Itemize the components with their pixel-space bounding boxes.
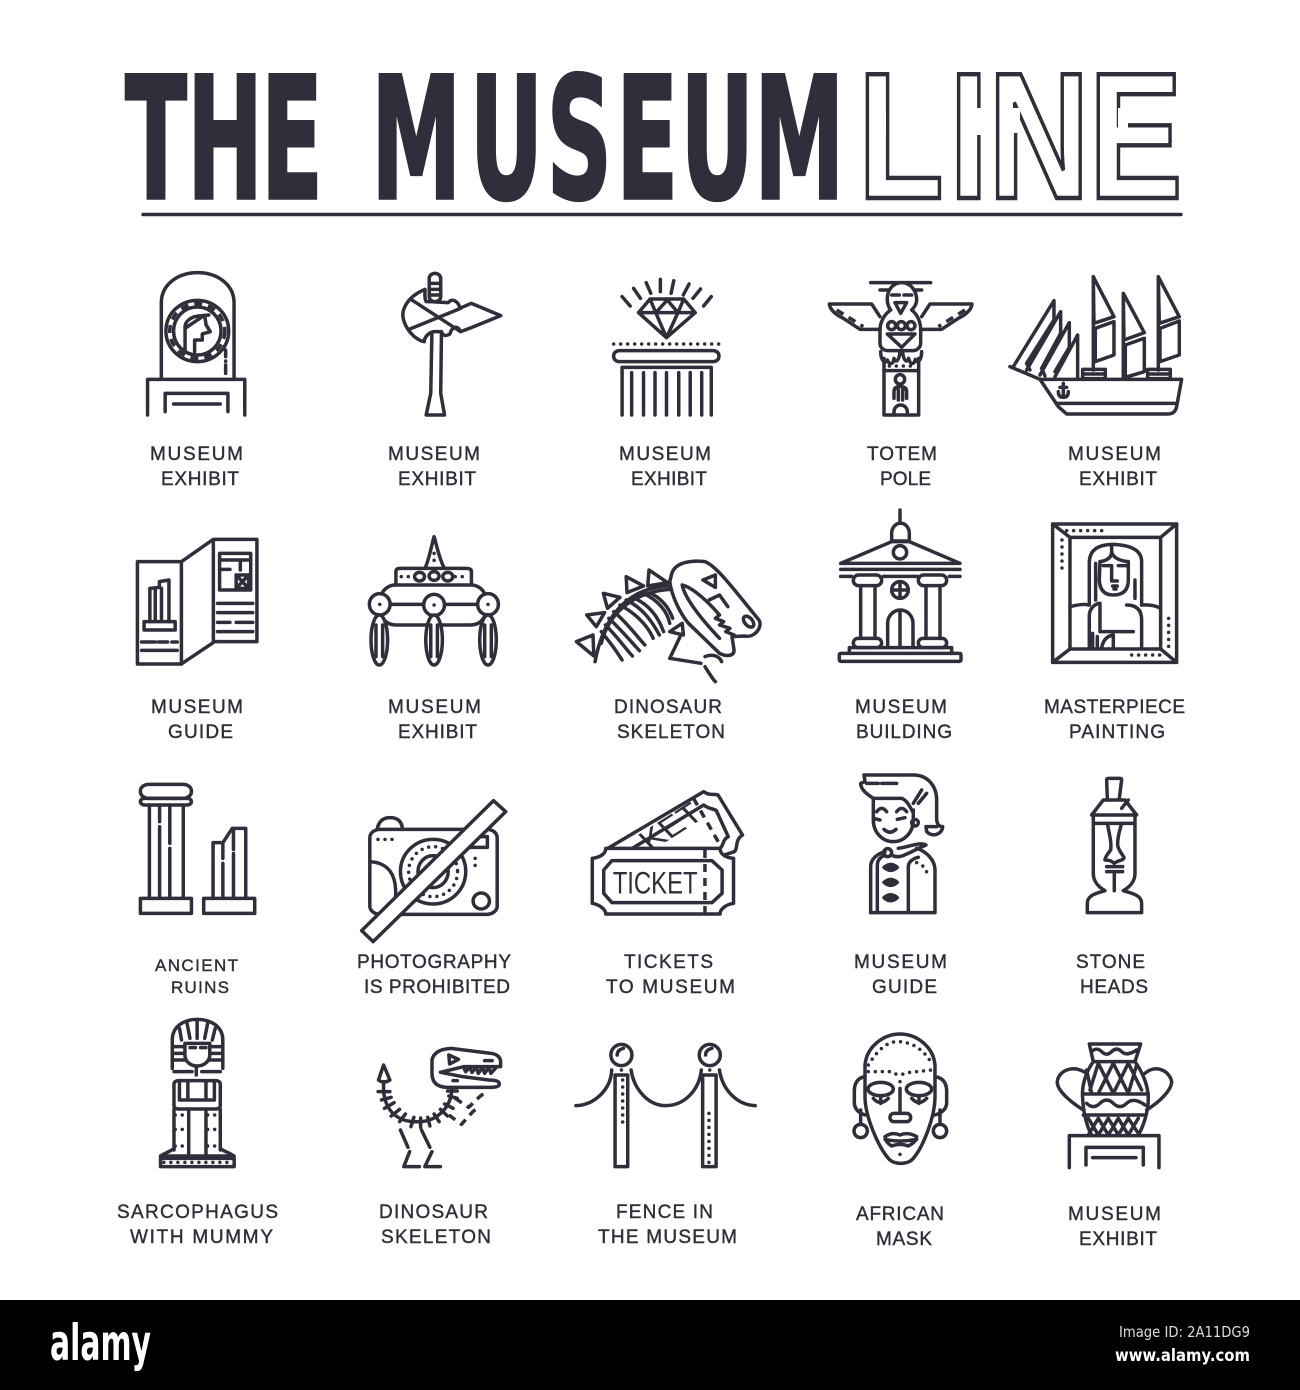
label: EXHIBIT [1079, 1229, 1157, 1250]
label [855, 697, 952, 743]
label: FENCE IN [616, 1202, 713, 1223]
label [854, 952, 947, 998]
label: MUSEUM [1068, 1204, 1161, 1225]
label: MUSEUM [388, 697, 481, 718]
label: HEADS [1080, 977, 1148, 998]
label: PAINTING [1069, 722, 1165, 743]
label: TOTEM [867, 444, 937, 465]
icon: museum tickets [592, 792, 743, 914]
label: TO MUSEUM [606, 977, 735, 998]
label: SARCOPHAGUS [117, 1202, 278, 1223]
label: MUSEUM [1068, 444, 1161, 465]
label [1044, 697, 1185, 743]
label: PHOTOGRAPHY [357, 952, 511, 973]
label: SKELETON [617, 722, 725, 743]
label [614, 697, 725, 743]
label: MUSEUM [388, 444, 480, 465]
icon: stone axe [403, 273, 501, 415]
icon: ancient ruins columns [140, 784, 255, 913]
label: EXHIBIT [398, 469, 476, 490]
label [619, 444, 711, 490]
label [598, 1202, 737, 1248]
icon: museum tickets: TICKET [613, 865, 698, 900]
label: MUSEUM [150, 444, 243, 465]
label: SKELETON [381, 1227, 491, 1248]
label [117, 1202, 278, 1248]
title underline [143, 213, 1181, 216]
label [388, 444, 480, 490]
icon: folded museum guide [137, 539, 257, 664]
label: POLE [880, 469, 931, 490]
label: MUSEUM [854, 952, 947, 973]
label [379, 1202, 491, 1248]
label: STONE [1076, 952, 1145, 973]
title: THE MUSEUM: THE MUSEUM [125, 41, 844, 238]
label [606, 952, 735, 998]
label [151, 697, 243, 743]
label: MUSEUM [855, 697, 947, 718]
icon: diamond on pedestal [614, 279, 719, 415]
label: ANCIENT [155, 956, 238, 975]
label [1068, 444, 1161, 490]
icon: museum tickets: KET [631, 796, 710, 857]
label: RUINS [171, 978, 229, 997]
title: LINE: LINE [858, 36, 1183, 237]
label: MUSEUM [151, 697, 243, 718]
icon: decorated vase on pedestal [1057, 1044, 1172, 1168]
label [357, 952, 511, 998]
label: IS PROHIBITED [364, 977, 510, 998]
label: EXHIBIT [631, 469, 707, 490]
website: www.alamy.com [1115, 1346, 1250, 1366]
icon: photography prohibited [362, 801, 506, 942]
label: DINOSAUR [379, 1202, 488, 1223]
label [150, 444, 243, 490]
image id: Image ID: 2A11DG9 [1119, 1323, 1250, 1341]
label: AFRICAN [856, 1204, 944, 1225]
icon: framed masterpiece painting [1053, 524, 1177, 662]
label [155, 956, 238, 997]
icon: museum building [839, 510, 961, 661]
footer bar [0, 1300, 1300, 1390]
icon: rope fence [576, 1044, 755, 1167]
icon: sarcophagus with mummy [161, 1019, 234, 1167]
label: EXHIBIT [1079, 469, 1157, 490]
icon: totem pole [829, 283, 972, 415]
label: TICKETS [624, 952, 713, 973]
label: MASTERPIECE [1044, 697, 1185, 718]
label: EXHIBIT [161, 469, 239, 490]
icon: stone head [1087, 778, 1142, 913]
label: BUILDING [856, 722, 952, 743]
label [1068, 1204, 1161, 1250]
label [856, 1204, 944, 1250]
label: GUIDE [168, 722, 233, 743]
label: GUIDE [872, 977, 937, 998]
label: WITH MUMMY [130, 1227, 273, 1248]
label: DINOSAUR [614, 697, 722, 718]
icon: small dinosaur skeleton [378, 1048, 501, 1167]
icon: dinosaur skeleton [576, 561, 760, 682]
icon: coin under glass dome [148, 273, 245, 415]
label: EXHIBIT [398, 722, 477, 743]
label: MUSEUM [619, 444, 711, 465]
label: THE MUSEUM [598, 1227, 737, 1248]
title [125, 36, 1183, 238]
label [1076, 952, 1148, 998]
icon: sailing ship [1010, 277, 1182, 414]
icon: african mask [854, 1034, 947, 1163]
icon: feathered crown exhibit [369, 537, 498, 665]
label [388, 697, 481, 743]
label [867, 444, 937, 490]
icon: museum guide person [861, 775, 943, 913]
label: MASK [876, 1229, 932, 1250]
logo: alamy [50, 1314, 151, 1372]
